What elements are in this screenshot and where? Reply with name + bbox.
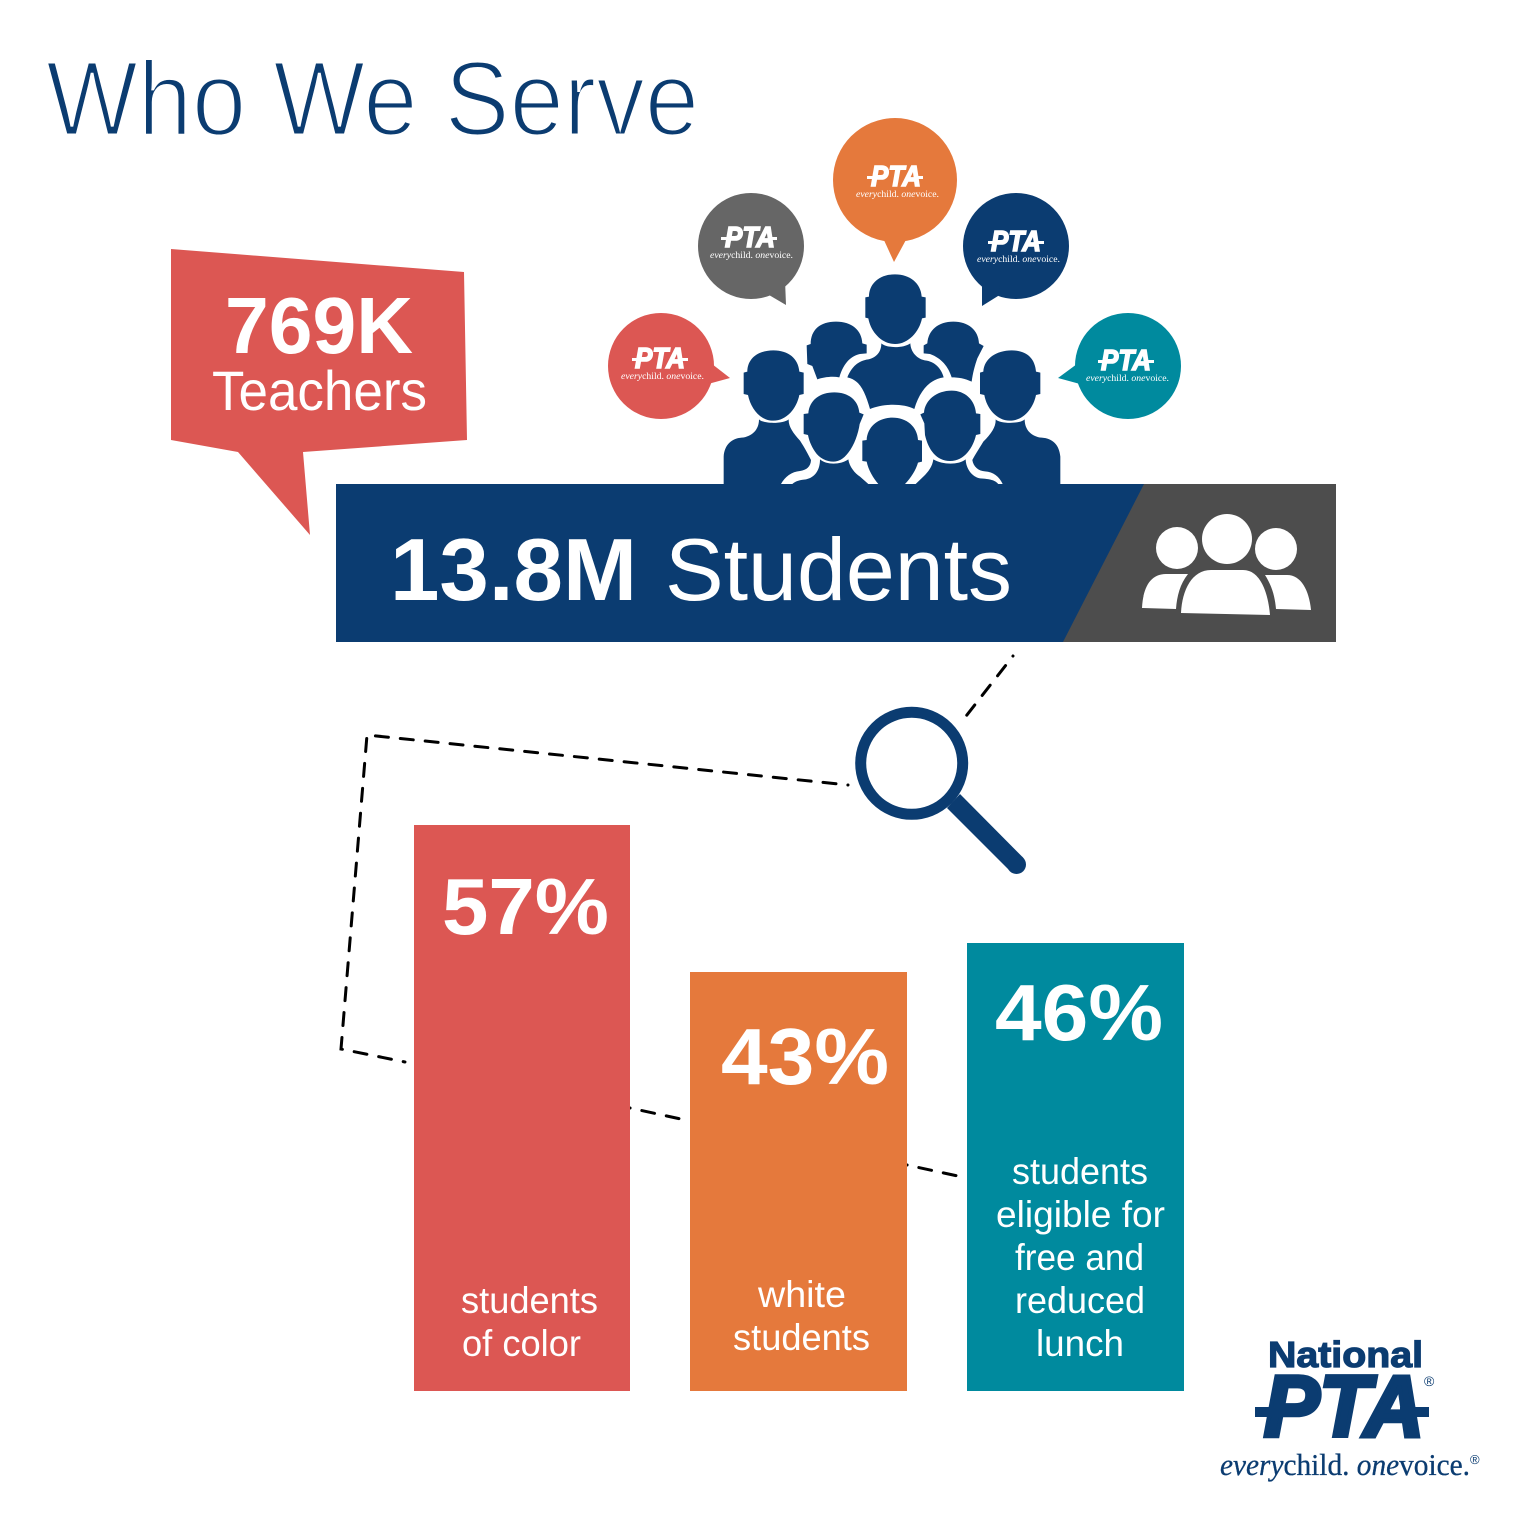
bar: white students: white bbox=[757, 1274, 846, 1315]
speech bubble: grey PTA bbox=[698, 193, 804, 305]
icon: magnifying glass bbox=[861, 712, 1026, 874]
bar: white students bbox=[690, 972, 907, 1391]
bar: free and reduced lunch: students bbox=[1012, 1151, 1148, 1192]
bar: free and reduced lunch: 46% bbox=[995, 968, 1163, 1057]
logo: National PTA: ® bbox=[1424, 1373, 1435, 1389]
speech bubble: teal PTA bbox=[1058, 313, 1181, 419]
speech bubble: red PTA: everychild. onevoice. bbox=[621, 372, 704, 382]
speech bubble: grey PTA: everychild. onevoice. bbox=[710, 251, 793, 261]
logo: National PTA: PTA bbox=[1264, 1359, 1424, 1455]
title: Who We Serve bbox=[46, 40, 699, 158]
callout: 769K teachers: 769K bbox=[225, 281, 413, 370]
bar: free and reduced lunch: reduced bbox=[1015, 1280, 1145, 1321]
bar: students of color: of color bbox=[462, 1323, 581, 1364]
bar: white students: 43% bbox=[721, 1012, 889, 1101]
logo: National PTA bbox=[1220, 1334, 1480, 1482]
speech bubble: orange PTA bbox=[833, 118, 957, 262]
speech bubble: navy PTA: PTA bbox=[991, 226, 1041, 258]
bar: free and reduced lunch: eligible for bbox=[996, 1194, 1165, 1235]
banner: 13.8M students: Students bbox=[665, 520, 1012, 619]
logo: National PTA: everychild. onevoice. bbox=[1220, 1447, 1470, 1482]
speech bubble: orange PTA: PTA bbox=[871, 161, 921, 193]
icon: group of three people bbox=[1142, 514, 1311, 615]
speech bubble: red PTA: PTA bbox=[635, 343, 685, 375]
banner: 13.8M students bbox=[336, 484, 1336, 642]
icon: crowd of people silhouettes bbox=[724, 274, 1060, 484]
bar: free and reduced lunch bbox=[967, 943, 1184, 1391]
bar: free and reduced lunch: lunch bbox=[1036, 1323, 1124, 1364]
speech bubble: grey PTA: PTA bbox=[725, 222, 775, 254]
logo: National PTA: ® bbox=[1470, 1452, 1480, 1467]
logo: National PTA: National bbox=[1268, 1334, 1423, 1375]
speech bubble: navy PTA: everychild. onevoice. bbox=[977, 255, 1060, 265]
bar: students of color: students bbox=[461, 1280, 598, 1321]
speech bubble: navy PTA bbox=[963, 193, 1069, 306]
callout: 769K teachers: Teachers bbox=[212, 359, 427, 422]
speech bubble: orange PTA: everychild. onevoice. bbox=[856, 190, 939, 200]
bar: white students: students bbox=[733, 1317, 870, 1358]
callout: 769K teachers bbox=[171, 249, 467, 535]
bar: students of color bbox=[414, 825, 630, 1391]
bar: free and reduced lunch: free and bbox=[1015, 1237, 1144, 1278]
speech bubble: teal PTA: PTA bbox=[1101, 345, 1151, 377]
speech bubble: teal PTA: everychild. onevoice. bbox=[1086, 374, 1169, 384]
dashed connector lines bbox=[341, 656, 1013, 1178]
bar: students of color: 57% bbox=[442, 862, 609, 951]
speech bubble: red PTA bbox=[608, 313, 730, 419]
banner: 13.8M students: 13.8M bbox=[390, 520, 637, 619]
